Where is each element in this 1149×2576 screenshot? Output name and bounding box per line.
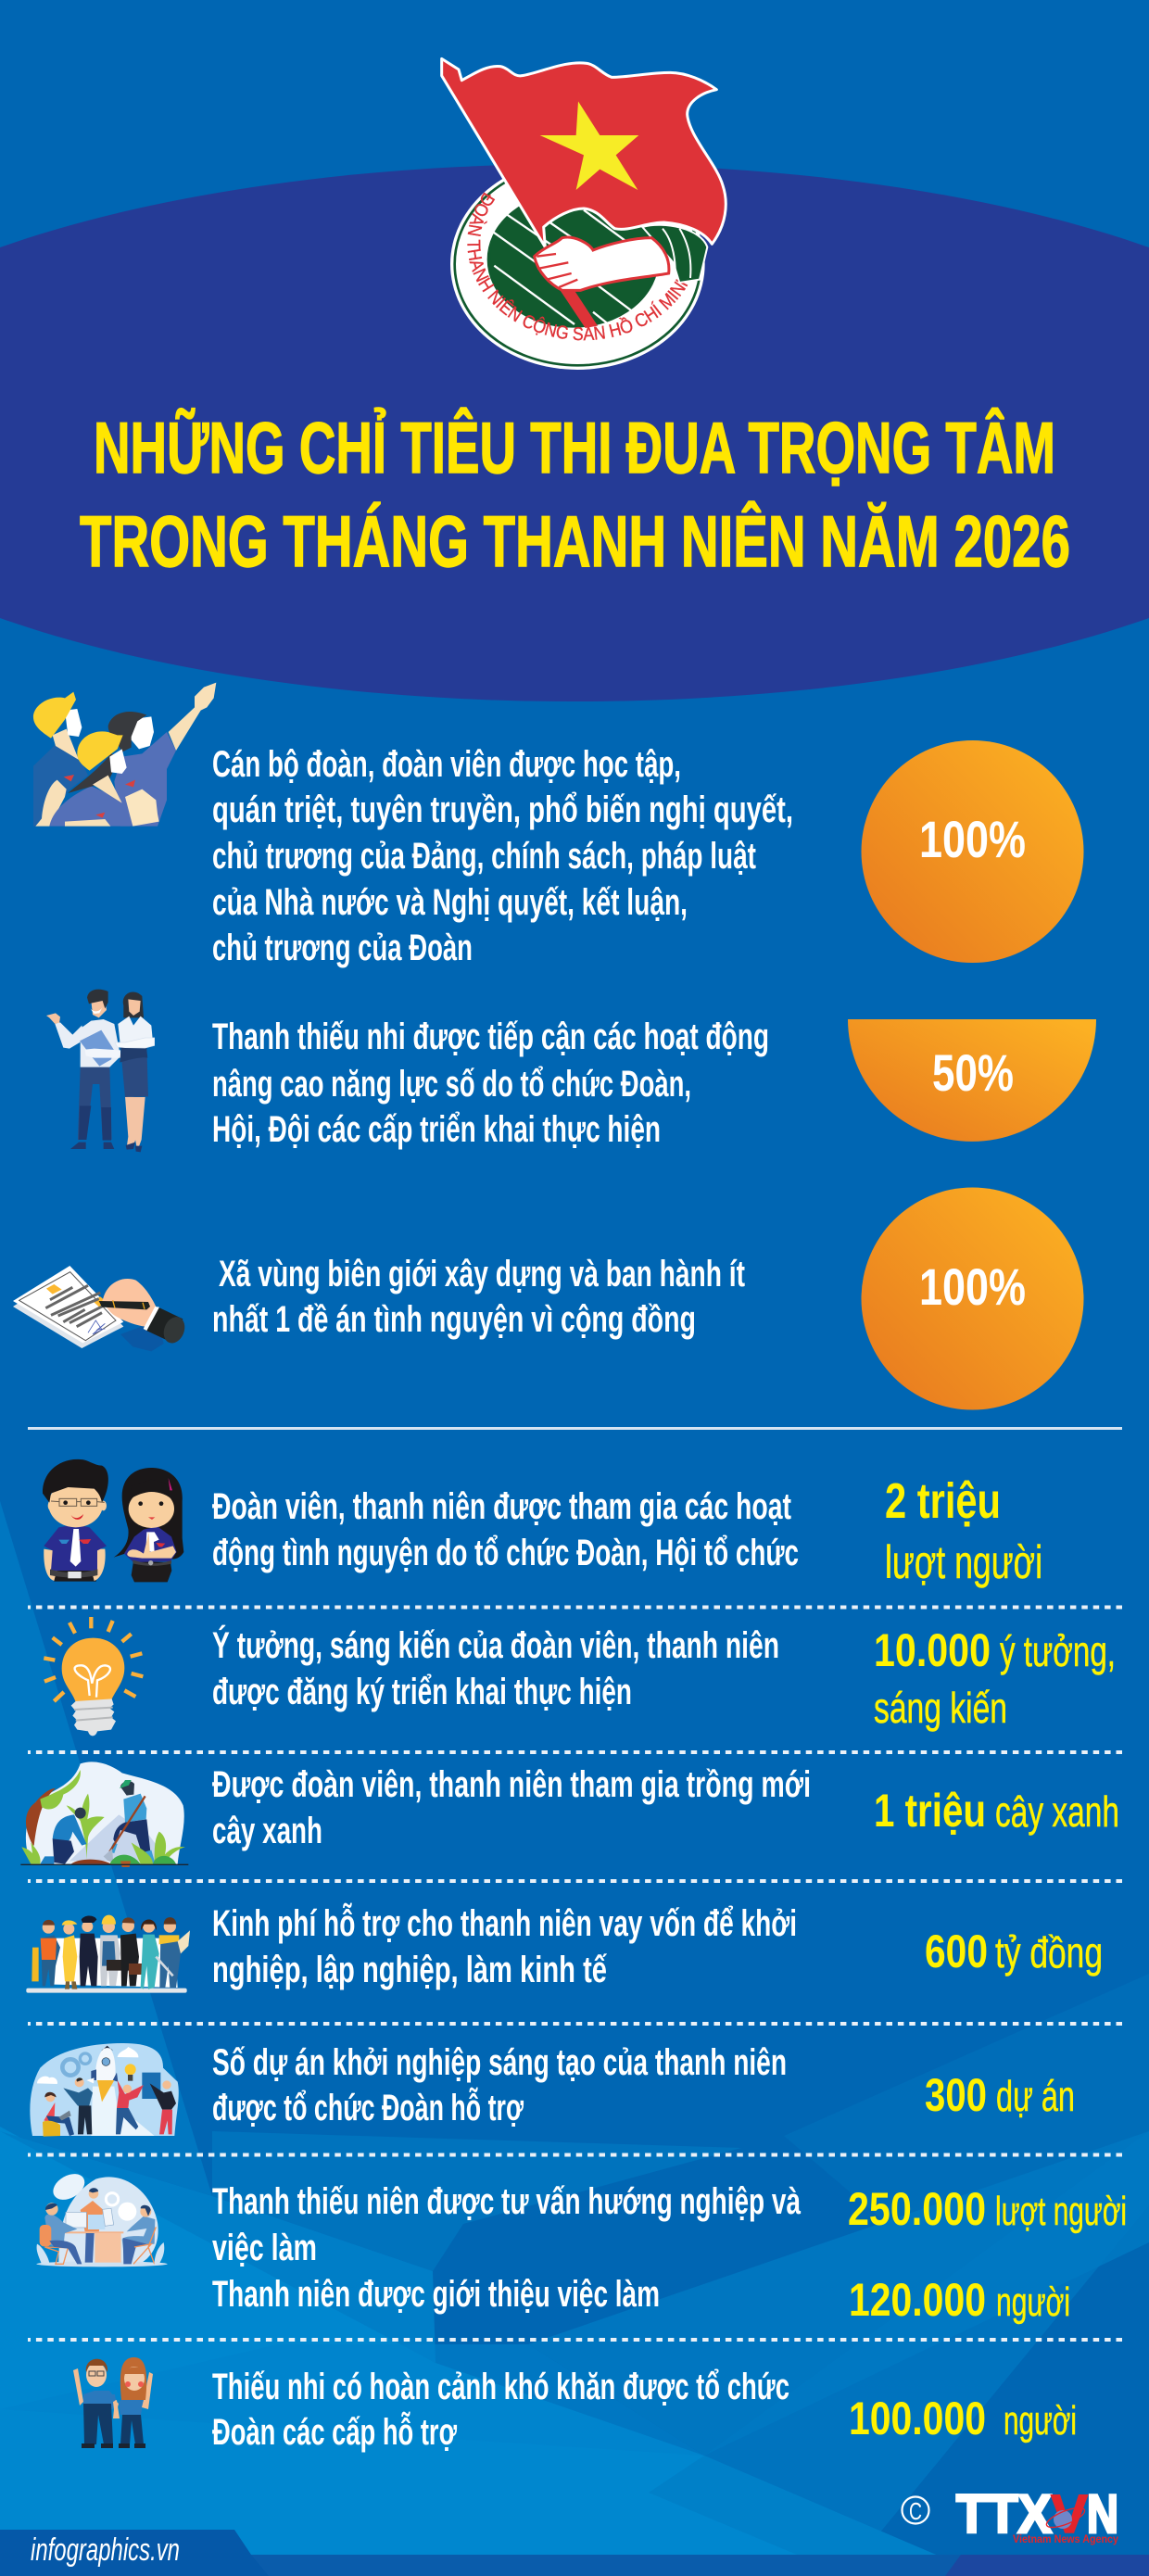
- icon: career counselling desk: [36, 2168, 168, 2267]
- icon: boy and girl waving: [73, 2357, 153, 2448]
- text: item 3: Xã vùng biên giới xây dựng và ban hành ít: [219, 1254, 745, 1294]
- value: 1 million trees: [874, 1785, 1119, 1837]
- text: volunteer: động tình nguyện do tổ chức Đoàn, Hội tổ chức: [212, 1533, 799, 1573]
- text: item 2: [212, 1017, 769, 1150]
- text: startups: [212, 2042, 787, 2128]
- text: career counselling: việc làm: [212, 2228, 317, 2268]
- value: 2 million: lượt người: [885, 1536, 1042, 1588]
- text: item 1: [212, 744, 793, 968]
- text: funding: Kinh phí hỗ trợ cho thanh niên vay vốn để khởi: [212, 1901, 797, 1944]
- text: funding: [212, 1901, 797, 1990]
- circle: 100%: 100%: [919, 1257, 1026, 1316]
- value: 10,000 ideas: [874, 1624, 1116, 1732]
- icon: man and woman standing: [46, 990, 155, 1152]
- text: item 1: quán triệt, tuyên truyền, phổ biến nghị quyết,: [212, 789, 793, 830]
- icon: hand signing document: [13, 1266, 188, 1351]
- circle: 100%: 100%: [919, 810, 1026, 868]
- value: 300 projects: 300: [925, 2069, 987, 2121]
- text: career counselling: [212, 2181, 802, 2315]
- text: item 1: chủ trương của Đoàn: [212, 928, 473, 968]
- icon: copyright: C: [909, 2497, 922, 2525]
- text: item 2: nâng cao năng lực số do tổ chức Đoàn,: [212, 1064, 691, 1105]
- value: 10,000 ideas: sáng kiến: [874, 1684, 1007, 1732]
- value: 600 billion: tỷ đồng: [995, 1928, 1103, 1976]
- text: startups: Số dự án khởi nghiệp sáng tạo của thanh niên: [212, 2042, 787, 2083]
- footer band: [0, 2530, 1149, 2576]
- value: 250,000 and 120,000: người: [996, 2279, 1070, 2325]
- value: 2 million: [885, 1473, 1042, 1588]
- title: [80, 407, 1070, 582]
- value: 250,000 and 120,000: 250.000: [848, 2183, 986, 2235]
- half circle: 50%: [848, 1019, 1096, 1142]
- text: item 2: Thanh thiếu nhi được tiếp cận các hoạt động: [212, 1017, 769, 1057]
- text: funding: nghiệp, lập nghiệp, làm kinh tế: [212, 1950, 608, 1990]
- header ellipse: [0, 164, 1149, 701]
- logo: TTXVN: [956, 2484, 1118, 2545]
- icon: copyright: [903, 2496, 928, 2525]
- text: item 1: Cán bộ đoàn, đoàn viên được học tập,: [212, 744, 681, 785]
- value: 600 billion: 600: [925, 1926, 988, 1977]
- text: trees: [212, 1764, 811, 1851]
- text: volunteer: Đoàn viên, thanh niên được tham gia các hoạt: [212, 1486, 791, 1527]
- text: item 3: nhất 1 đề án tình nguyện vì cộng đồng: [212, 1299, 696, 1340]
- icon: Youth Union logo: [440, 57, 727, 370]
- logo: TTXVN: V: [1051, 2484, 1088, 2544]
- text: volunteer: [212, 1486, 799, 1573]
- source: infographics.vn: infographics.vn: [31, 2532, 180, 2568]
- text: children: Đoàn các cấp hỗ trợ: [212, 2410, 457, 2453]
- icon: group of workers: [26, 1915, 190, 1993]
- value: 10,000 ideas: 10.000: [874, 1624, 991, 1676]
- text: ideas: [212, 1623, 779, 1712]
- value: 600 billion: [925, 1926, 1103, 1977]
- logo: TTXVN: N: [1087, 2484, 1118, 2544]
- circle: 100%: [862, 1188, 1084, 1410]
- icon: two union members: [43, 1459, 183, 1582]
- value: 300 projects: dự án: [996, 2072, 1075, 2120]
- value: 250,000 and 120,000: 120.000: [849, 2274, 986, 2326]
- value: 100,000: 100.000: [849, 2393, 986, 2444]
- text: item 3: [212, 1254, 745, 1340]
- text: ideas: được đăng ký triển khai thực hiện: [212, 1672, 632, 1712]
- text: startups: được tổ chức Đoàn hỗ trợ: [212, 2086, 524, 2128]
- text: career counselling: Thanh niên được giới thiệu việc làm: [212, 2274, 660, 2315]
- circle: 100%: [862, 740, 1084, 963]
- text: item 1: của Nhà nước và Nghị quyết, kết luận,: [212, 882, 688, 923]
- text: children: Thiếu nhi có hoàn cảnh khó khăn được tổ chức: [212, 2367, 789, 2407]
- text: trees: Được đoàn viên, thanh niên tham gia trồng mới: [212, 1764, 811, 1805]
- icon: Youth Union logo: ĐOÀN THANH NIÊN CỘNG SẢN HỒ CHÍ MINH: [467, 193, 688, 341]
- value: 100,000: người: [1004, 2398, 1077, 2443]
- icon: startup team with rocket: [30, 2043, 179, 2137]
- icon: workers with raised arm: [33, 683, 216, 827]
- icon: planting trees: [20, 1762, 188, 1867]
- text: item 1: chủ trương của Đảng, chính sách, pháp luật: [212, 836, 756, 877]
- value: 2 million: 2 triệu: [885, 1473, 1001, 1529]
- half circle: 50%: 50%: [932, 1043, 1014, 1102]
- text: trees: cây xanh: [212, 1811, 322, 1851]
- value: 250,000 and 120,000: [848, 2183, 1127, 2326]
- value: 300 projects: [925, 2069, 1075, 2121]
- text: ideas: Ý tưởng, sáng kiến của đoàn viên, thanh niên: [212, 1623, 779, 1666]
- logo: TTXVN: Vietnam News Agency: [1013, 2532, 1118, 2545]
- value: 1 million trees: 1 triệu: [874, 1785, 986, 1837]
- text: career counselling: Thanh thiếu niên được tư vấn hướng nghiệp và: [212, 2181, 802, 2222]
- logo: TTXVN: TTX: [956, 2484, 1052, 2544]
- text: children: [212, 2367, 789, 2453]
- text: item 2: Hội, Đội các cấp triển khai thực hiện: [212, 1109, 661, 1150]
- icon: light bulb: [44, 1617, 143, 1736]
